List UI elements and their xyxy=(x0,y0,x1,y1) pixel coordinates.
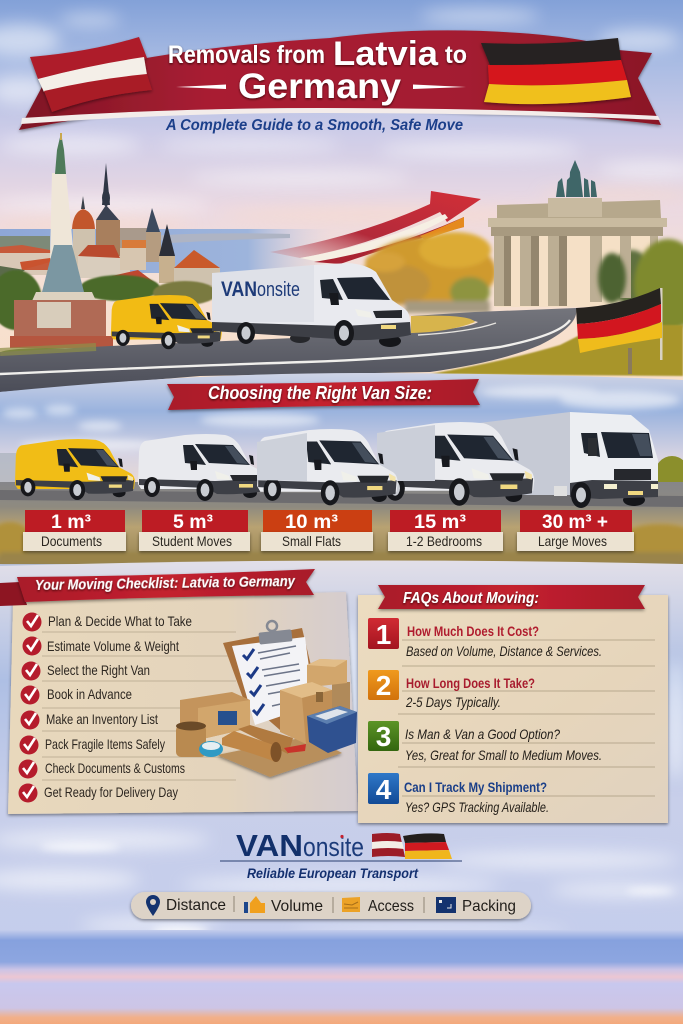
factor bar: pill: Distance xyxy=(166,897,226,914)
size card: 1 m3: 1 m³ xyxy=(51,512,91,533)
title text: to xyxy=(445,41,467,69)
size card: 30 m3: 30 m³ + xyxy=(542,512,608,533)
FAQ 4: Yes? GPS Tracking Available. xyxy=(405,799,549,815)
boxes xyxy=(180,659,350,744)
bushes: right roadside xyxy=(430,325,683,376)
checklist item 4: Book in Advance xyxy=(47,686,132,702)
checklist item 3: Select the Right Van xyxy=(47,662,150,678)
FAQ 2: 2 xyxy=(376,670,391,701)
background: lower sky xyxy=(0,560,683,960)
FAQ 2 xyxy=(368,670,535,710)
van: large white VANonsite: VAN xyxy=(221,278,257,301)
icon: volume xyxy=(244,896,265,913)
packing rolls and tape xyxy=(176,722,306,762)
buildings: old town xyxy=(22,240,220,286)
FAQ 1: Based on Volume, Distance & Services. xyxy=(406,643,602,659)
trees: autumn xyxy=(364,232,496,313)
heading: Choosing the Right Van Size xyxy=(167,379,480,410)
factor bar: pill xyxy=(131,892,531,919)
road: van section xyxy=(0,482,683,564)
title text: Latvia xyxy=(333,35,439,73)
size card: 10 m3: Small Flats xyxy=(282,533,341,549)
background: top sky xyxy=(0,0,683,380)
background: bottom colour bands xyxy=(0,930,683,1024)
checklist item 5 xyxy=(20,710,158,730)
background: van section sky xyxy=(0,373,683,500)
logo: VANonsite: onsite xyxy=(303,832,364,862)
title text: Germany xyxy=(238,67,402,106)
statue: quadriga xyxy=(556,160,597,197)
logo: VANonsite xyxy=(220,828,462,881)
size card: 1 m3: Documents xyxy=(41,533,102,549)
title text xyxy=(168,35,467,106)
FAQ 1 xyxy=(368,618,602,659)
checklist item 5: Make an Inventory List xyxy=(46,711,158,727)
checklist item 2: Estimate Volume & Weight xyxy=(47,638,179,654)
checklist item 7: Check Documents & Customs xyxy=(45,760,185,776)
FAQ 4: 4 xyxy=(376,774,392,805)
logo: VANonsite: Reliable European Transport xyxy=(247,866,418,881)
size card: 10 m3 xyxy=(261,510,373,551)
heading: checklist ribbon xyxy=(0,569,315,606)
heading: FAQ ribbon: FAQs About Moving: xyxy=(403,590,539,607)
size card: 10 m3: 10 m³ xyxy=(285,512,338,533)
FAQ 1: How Much Does It Cost? xyxy=(407,623,539,639)
size card: 30 m3 xyxy=(517,510,634,551)
road: dark stripe xyxy=(0,490,683,507)
factor bar: pill: Volume xyxy=(271,898,323,915)
ground: gold bushes xyxy=(0,522,683,562)
heading: Choosing the Right Van Size: Choosing the Right Van Size: xyxy=(208,383,432,403)
icon: packing xyxy=(436,897,456,913)
FAQ 3: Yes, Great for Small to Medium Moves. xyxy=(405,747,602,763)
scene: Riga skyline and water xyxy=(0,163,330,330)
van: 10 m3 xyxy=(257,429,398,505)
FAQ 1: 1 xyxy=(376,619,391,650)
icon: distance pin xyxy=(146,895,160,916)
FAQ 2: 2-5 Days Typically. xyxy=(405,694,501,710)
subtitle: A Complete Guide to a Smooth, Safe Move xyxy=(165,117,463,134)
arrow: ribbon to Germany xyxy=(270,191,481,264)
size card: 15 m3: 1-2 Bedrooms xyxy=(406,533,482,549)
checklist item 2 xyxy=(22,636,179,656)
van: 1 m3 yellow xyxy=(15,439,135,500)
FAQ 4 xyxy=(368,773,549,815)
checklist item 1 xyxy=(22,612,192,632)
van: yellow xyxy=(111,295,222,349)
flag: Germany xyxy=(481,38,631,104)
size card: 5 m3: Student Moves xyxy=(152,533,232,549)
icon: access xyxy=(342,897,360,912)
clipboard xyxy=(223,621,322,730)
size card: 5 m3: 5 m³ xyxy=(173,512,213,533)
panel: FAQs xyxy=(358,585,668,823)
checklist item 6 xyxy=(20,736,165,754)
flag: Latvia xyxy=(30,37,152,112)
trees: left xyxy=(0,270,217,330)
checklist item 4 xyxy=(20,686,132,704)
illustration: clipboard and boxes xyxy=(176,621,357,777)
size card: 5 m3 xyxy=(139,510,250,551)
tower: cathedral spire xyxy=(96,163,120,270)
FAQ 3: 3 xyxy=(376,721,391,752)
blue box xyxy=(307,706,357,753)
van: 15 m3 xyxy=(377,422,534,506)
van: large white VANonsite: onsite xyxy=(257,279,300,301)
FAQ 4: Can I Track My Shipment? xyxy=(404,779,547,795)
size card: 15 m3: 15 m³ xyxy=(414,512,466,533)
panel: moving checklist xyxy=(0,569,358,814)
heading: checklist ribbon: Your Moving Checklist: Latvia to Germany xyxy=(35,573,296,594)
checklist item 8 xyxy=(18,784,178,802)
road: top xyxy=(0,308,576,392)
size card: 15 m3 xyxy=(388,510,503,551)
flag: Germany on pole xyxy=(576,288,662,374)
tower: right spires xyxy=(146,208,175,283)
checklist item 8: Get Ready for Delivery Day xyxy=(44,784,178,800)
checklist item 3 xyxy=(22,662,150,680)
size card: 1 m3 xyxy=(23,510,126,551)
FAQ 3: Is Man & Van a Good Option? xyxy=(405,726,560,742)
title banner xyxy=(19,30,661,130)
truck: 30 m3 xyxy=(479,412,658,508)
logo: VANonsite: VAN xyxy=(236,828,303,863)
trees: right xyxy=(598,239,683,331)
FAQ 2: How Long Does It Take? xyxy=(406,675,535,691)
van: 5 m3 xyxy=(138,434,267,501)
monument: Freedom Monument xyxy=(0,133,113,358)
landmark: Brandenburg Gate xyxy=(488,160,667,307)
checklist item 1: Plan & Decide What to Take xyxy=(48,613,192,629)
size card: 30 m3: Large Moves xyxy=(538,533,607,549)
van: large white VANonsite xyxy=(212,263,411,347)
title text: Removals from xyxy=(168,41,325,69)
logo flags xyxy=(372,833,452,859)
FAQ 3 xyxy=(368,721,602,763)
factor bar: pill: Packing xyxy=(462,898,516,915)
factor bar: pill: Access xyxy=(368,898,414,915)
tower: red dome xyxy=(72,196,95,273)
checklist item 7 xyxy=(18,760,185,778)
checklist item 6: Pack Fragile Items Safely xyxy=(45,736,165,752)
heading: FAQ ribbon xyxy=(378,585,645,609)
